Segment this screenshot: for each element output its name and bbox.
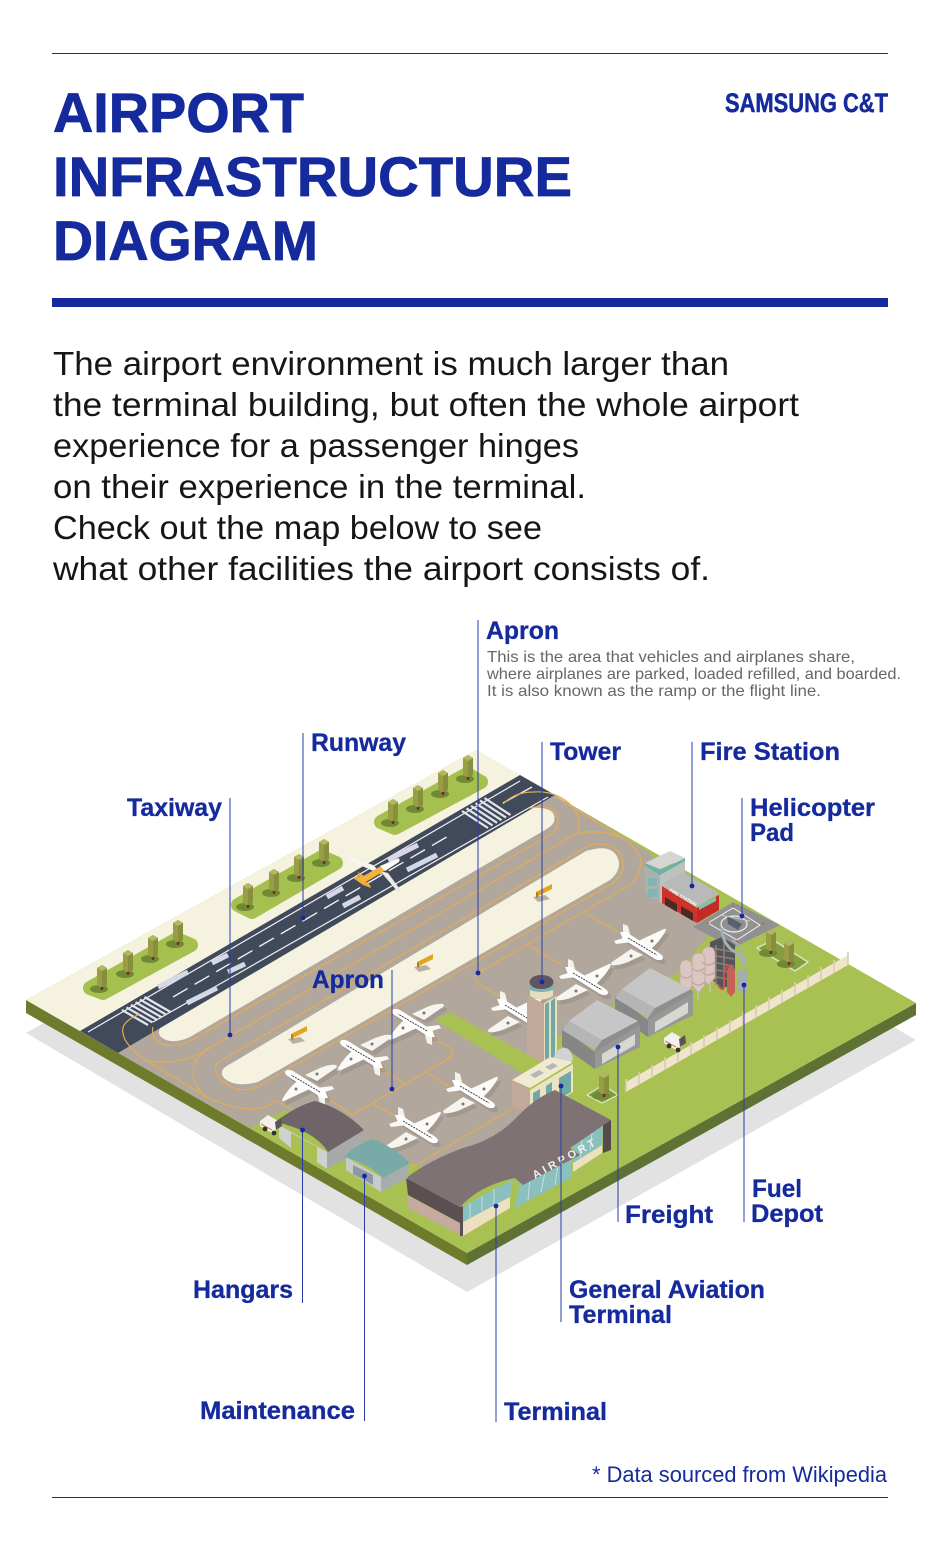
maintenance bbox=[344, 1139, 410, 1192]
leader: general aviation bbox=[559, 1084, 563, 1322]
tarmac bbox=[118, 795, 712, 1175]
bottom rule bbox=[52, 1497, 888, 1498]
label: fuel depot bbox=[751, 1175, 824, 1228]
label: apron with description: It is also known as the ramp or the flight line. bbox=[487, 683, 821, 700]
runway bbox=[80, 775, 555, 1053]
hangar truck bbox=[260, 1115, 282, 1135]
hangar bbox=[275, 1101, 364, 1169]
leader: runway bbox=[301, 733, 305, 920]
inner grass 2 bbox=[222, 848, 619, 1084]
title: AIRPORT bbox=[53, 81, 304, 144]
tree pads bbox=[90, 774, 481, 993]
title: DIAGRAM bbox=[53, 209, 318, 272]
label: hangars: Hangars bbox=[193, 1276, 293, 1304]
leader lines bbox=[228, 620, 746, 1422]
intro text: what other facilities the airport consists of. bbox=[52, 550, 710, 587]
heading rule bbox=[52, 298, 888, 307]
label: taxiway: Taxiway bbox=[127, 794, 222, 822]
label: apron with description bbox=[486, 617, 901, 700]
runway plane bbox=[348, 856, 402, 892]
intro text: the terminal building, but often the whole airport bbox=[53, 386, 799, 423]
leader: hangars bbox=[300, 1128, 305, 1303]
fence bbox=[626, 952, 848, 1092]
general aviation terminal bbox=[512, 1048, 573, 1117]
label: general aviation terminal: Terminal bbox=[569, 1301, 672, 1329]
source note: * Data sourced from Wikipedia bbox=[592, 1462, 888, 1487]
intro text: on their experience in the terminal. bbox=[53, 468, 586, 505]
helicopter pad bbox=[693, 902, 780, 948]
airport sign: AIRPORT bbox=[531, 1136, 601, 1182]
label: maintenance: Maintenance bbox=[200, 1397, 355, 1425]
label: helicopter pad: Pad bbox=[750, 819, 794, 847]
logo: Samsung C&T: SAMSUNG C&T bbox=[725, 88, 888, 118]
leader: freight bbox=[616, 1045, 620, 1222]
label: terminal: Terminal bbox=[504, 1398, 607, 1426]
title: INFRASTRUCTURE bbox=[53, 145, 572, 208]
leader: apron top bbox=[476, 620, 480, 975]
isometric airport map bbox=[26, 620, 916, 1422]
intro text bbox=[52, 345, 799, 587]
fire station: FIRE STATION bbox=[668, 888, 697, 907]
fire station bbox=[645, 851, 719, 923]
lone tree bbox=[587, 1072, 618, 1103]
leader: taxiway bbox=[228, 798, 232, 1037]
label: apron with description: Apron bbox=[486, 617, 559, 645]
platform shadow bbox=[26, 783, 916, 1292]
planes bbox=[282, 924, 669, 1152]
label: helicopter pad: Helicopter bbox=[750, 794, 875, 822]
right tree pad and trees bbox=[757, 929, 808, 971]
platform left side bbox=[26, 1000, 467, 1265]
top rule bbox=[52, 53, 888, 54]
label: freight: Freight bbox=[625, 1201, 714, 1229]
label: runway: Runway bbox=[311, 729, 406, 757]
taxiway markings bbox=[123, 792, 641, 1170]
threshold stripes bbox=[122, 997, 170, 1025]
label: general aviation terminal: General Aviation bbox=[569, 1276, 765, 1304]
label: general aviation terminal bbox=[569, 1276, 765, 1329]
title bbox=[53, 81, 572, 272]
freight truck bbox=[664, 1032, 686, 1052]
fuel depot bbox=[680, 928, 748, 1005]
apron green strip bbox=[435, 1012, 537, 1075]
intro text: Check out the map below to see bbox=[53, 509, 542, 546]
leader: terminal bbox=[494, 1204, 498, 1422]
label: fuel depot: Fuel bbox=[752, 1175, 802, 1203]
leader: helicopter pad bbox=[740, 798, 744, 918]
leader: fire station bbox=[690, 742, 694, 888]
intro text: experience for a passenger hinges bbox=[53, 427, 579, 464]
freight buildings bbox=[562, 968, 693, 1069]
baggage carts bbox=[288, 884, 552, 1044]
cream verge bbox=[26, 750, 555, 1053]
label: apron with description: This is the area that vehicles and airplanes share, bbox=[487, 649, 855, 666]
label: apron with description: where airplanes are parked, loaded refilled, and boarded. bbox=[486, 666, 901, 683]
leader: apron lower bbox=[390, 970, 394, 1091]
leader: fuel depot bbox=[742, 983, 746, 1222]
label: tower: Tower bbox=[550, 738, 621, 766]
terminal bbox=[406, 1090, 611, 1236]
label: apron lower: Apron bbox=[312, 966, 384, 994]
intro text: The airport environment is much larger than bbox=[53, 345, 729, 382]
leader: tower bbox=[540, 742, 544, 984]
inner grass 1 bbox=[159, 808, 554, 1041]
platform top grass bbox=[26, 750, 916, 1253]
label: fuel depot: Depot bbox=[751, 1200, 824, 1228]
leader: maintenance bbox=[362, 1174, 367, 1421]
control tower bbox=[527, 975, 557, 1068]
platform right side bbox=[467, 1003, 916, 1265]
label: helicopter pad bbox=[750, 794, 875, 847]
label: fire station: Fire Station bbox=[700, 738, 840, 766]
trees bbox=[90, 755, 474, 993]
